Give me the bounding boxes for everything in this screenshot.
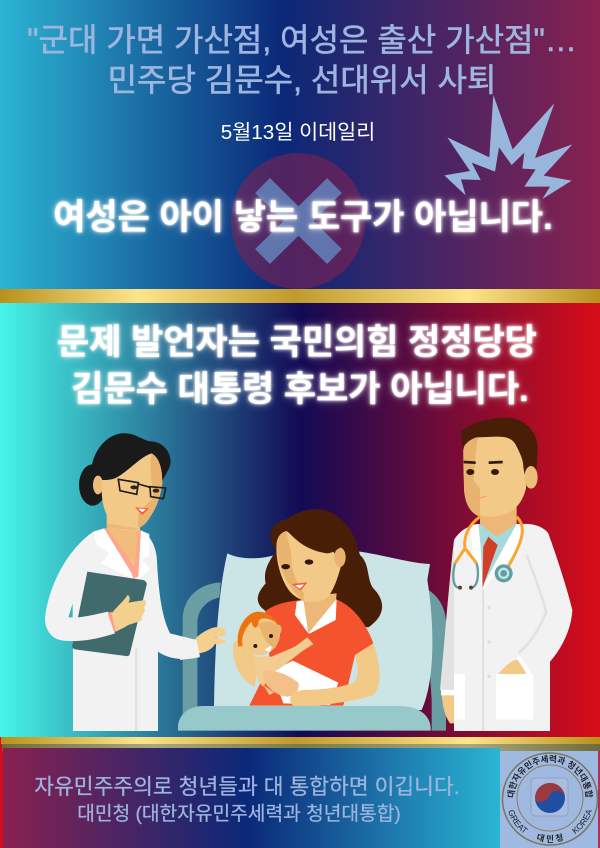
logo: organisation seal: 대 민 청	[536, 833, 563, 843]
logo: organisation seal: KOREA	[572, 810, 592, 834]
icon: crossed-out circle	[231, 153, 365, 289]
illustration: female doctor	[45, 433, 200, 731]
hand on clipboard	[112, 595, 146, 632]
text: source and date: 5월13일 이데일리	[221, 121, 375, 144]
coat	[45, 528, 200, 731]
divider: lower olive strip	[2, 744, 600, 751]
pillow	[214, 552, 432, 710]
text: organisation name: 대민청 (대한자유민주세력과 청년대통합)	[77, 804, 401, 825]
mother dress	[249, 598, 373, 706]
panel: middle illustration section	[0, 303, 600, 737]
bed frame	[183, 582, 446, 731]
divider: top gold bar	[0, 289, 600, 303]
clipboard	[72, 572, 147, 656]
title: news headline line 2: 민주당 김문수, 선대위서 사퇴	[108, 62, 496, 98]
mother collar and neck	[302, 593, 337, 633]
mother face	[276, 531, 342, 602]
illustration: male doctor	[440, 418, 572, 731]
panel: bottom slogan section	[3, 748, 500, 848]
mother hand	[263, 670, 299, 697]
baby head	[275, 625, 282, 634]
logo: organisation seal: 대한자유민주세력과 청년대통합	[507, 754, 594, 798]
face	[102, 453, 162, 527]
illustration: bed and mother with baby	[178, 509, 446, 731]
heading: statement line 1: 문제 발언자는 국민의힘 정정당당	[57, 323, 537, 362]
mother other arm	[233, 637, 257, 687]
glasses	[118, 479, 166, 499]
panel: bottom edge backing	[0, 737, 600, 848]
title: news headline line 1: "군대 가면 가산점, 여성은 출산 가산점"…	[27, 22, 577, 58]
logo: organisation seal: GREAT	[508, 810, 528, 833]
divider: lower gold bar	[1, 737, 600, 744]
heading: women are not tools: 여성은 아이 낳는 도구가 아닙니다.	[53, 198, 553, 237]
sleeve	[45, 599, 115, 641]
baby wrap	[272, 661, 338, 705]
mother arm	[290, 643, 380, 706]
icon: starburst	[444, 95, 572, 199]
stethoscope	[455, 517, 522, 567]
blanket	[178, 706, 431, 731]
text: slogan: 자유민주주의로 청년들과 대 통합하면 이깁니다.	[34, 775, 460, 799]
logo: organisation seal	[500, 751, 600, 848]
heading: statement line 2: 김문수 대통령 후보가 아닙니다.	[71, 370, 529, 409]
panel: top news section	[0, 0, 600, 289]
hand of female doctor on pillow	[194, 627, 226, 653]
mother hair	[258, 509, 382, 627]
baby body	[255, 637, 313, 687]
baby hair	[238, 612, 278, 647]
